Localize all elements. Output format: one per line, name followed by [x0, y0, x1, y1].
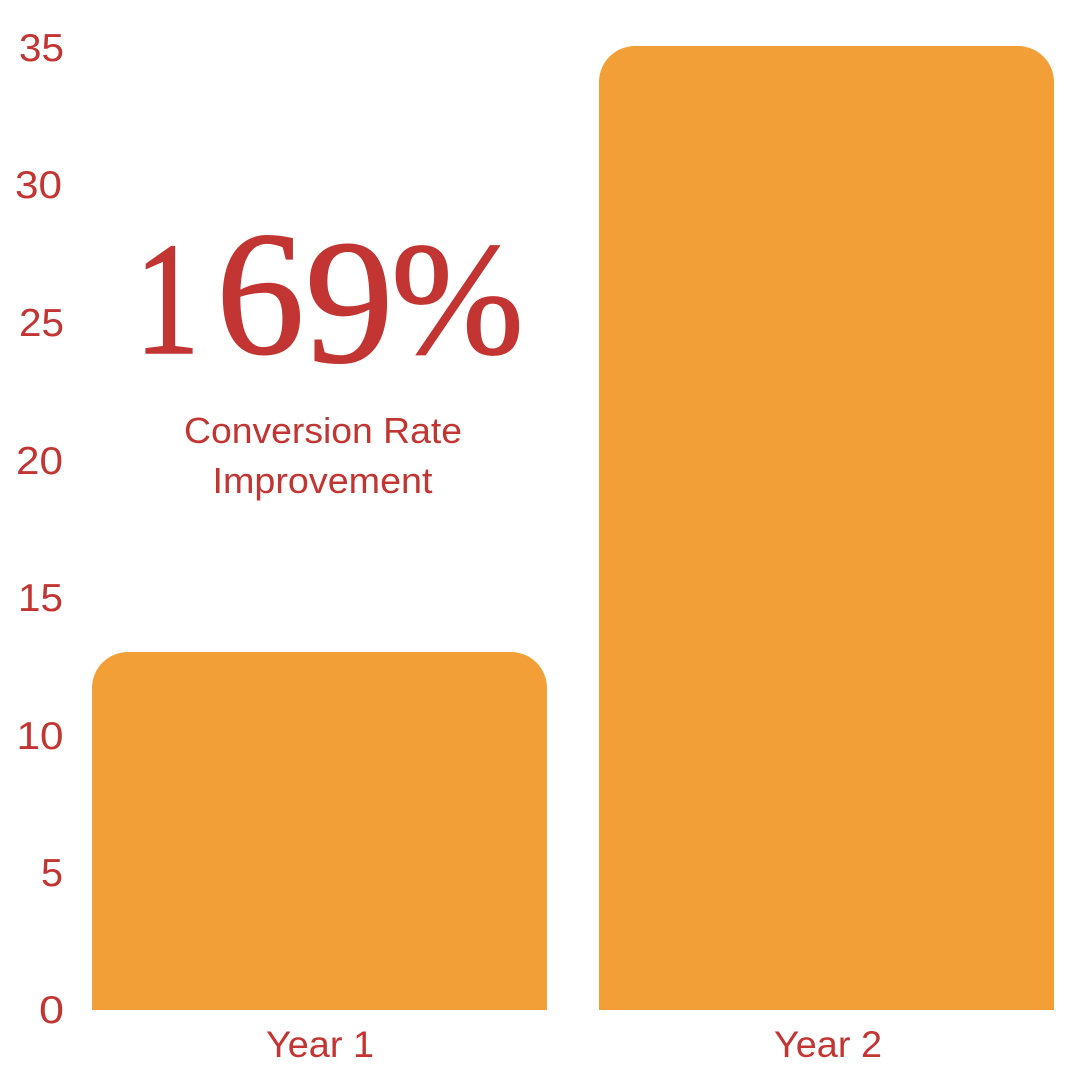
- big stat: 169%: 6: [216, 196, 304, 392]
- big stat: 169%: %: [391, 209, 524, 388]
- y axis labels: 5: [41, 852, 63, 895]
- y axis labels: 35: [19, 27, 64, 70]
- y axis labels: 25: [19, 302, 64, 345]
- x axis label: Year 2: Year 2: [774, 1024, 882, 1065]
- stat caption: Improvement: [212, 460, 432, 501]
- y axis labels: 10: [16, 715, 64, 758]
- y axis labels: 0: [39, 989, 64, 1032]
- bar: Year 2: [599, 46, 1054, 1010]
- y axis labels: 15: [18, 577, 63, 620]
- y axis labels: 30: [15, 164, 62, 207]
- stat caption: [184, 410, 462, 501]
- bar: Year 1: [92, 652, 547, 1010]
- y axis labels: 20: [16, 440, 63, 483]
- big stat: 169%: [135, 196, 524, 400]
- x axis label: Year 1: Year 1: [266, 1024, 374, 1065]
- stat caption: Conversion Rate: [184, 410, 462, 451]
- big stat: 169%: 1: [135, 209, 200, 388]
- big stat: 169%: 9: [305, 204, 394, 400]
- y axis labels: [15, 27, 64, 1032]
